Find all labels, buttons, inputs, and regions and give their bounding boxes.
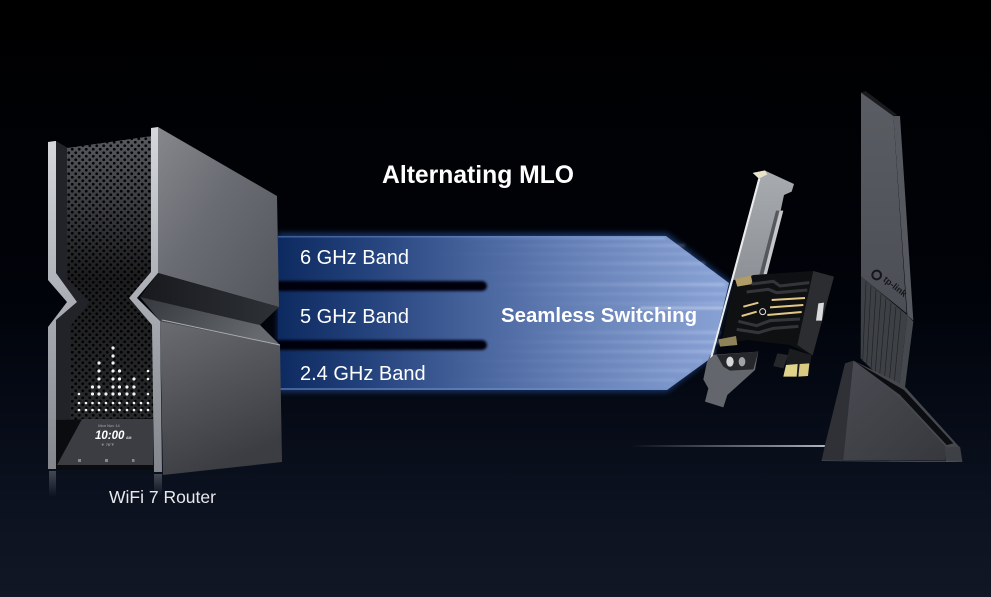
logo mark <box>872 271 881 279</box>
label: 5 GHz band: 5 GHz Band <box>300 306 409 328</box>
heatsink ridges <box>737 281 809 333</box>
title: Alternating MLO <box>382 162 574 189</box>
PCIe gold pins left <box>783 364 798 377</box>
arrow streaks <box>278 236 726 390</box>
antenna lower side <box>898 315 913 395</box>
PCIe WiFi card <box>703 170 834 407</box>
board side <box>797 271 834 355</box>
card bracket plate <box>711 171 794 357</box>
antenna back edge <box>861 91 897 116</box>
slit between 5 GHz and 2.4 GHz <box>270 340 487 350</box>
router dark wedge <box>140 273 279 325</box>
arrow: band streams <box>270 233 732 392</box>
antenna ribs <box>863 282 901 393</box>
arrow glow <box>278 233 732 392</box>
router base <box>56 418 156 470</box>
logo wordmark: tp-link <box>881 274 909 299</box>
side connector <box>816 303 824 321</box>
PCIe connector <box>783 348 812 377</box>
router left steel strip <box>48 141 77 469</box>
router top panel <box>158 127 279 307</box>
label: 6 GHz band: 6 GHz Band <box>300 247 409 269</box>
antenna connector top <box>735 276 753 287</box>
router perforated mesh <box>67 136 154 420</box>
gold contacts on heatsink <box>742 298 805 316</box>
PCIe gold pins right <box>798 363 809 377</box>
tp-link logo on antenna <box>872 271 909 299</box>
bracket lower tail <box>703 352 758 407</box>
router reflection <box>49 471 162 497</box>
floor line <box>630 445 826 447</box>
router lower panel <box>160 321 282 475</box>
stand outer rim <box>853 361 961 448</box>
antenna with stand <box>822 91 962 462</box>
router left inner wall <box>56 141 89 468</box>
antenna ribbed lower part <box>861 277 907 395</box>
mesh shading <box>67 136 154 420</box>
screen time: 10:00 <box>95 430 125 442</box>
stand foot line <box>822 460 962 463</box>
router light wedge <box>140 297 280 345</box>
antenna upper blade <box>861 93 907 313</box>
router touch screen <box>57 419 153 465</box>
screen panel <box>57 419 153 465</box>
arrow body <box>278 236 729 390</box>
label: seamless switching: Seamless Switching <box>501 305 697 327</box>
screen AM: AM <box>126 436 132 440</box>
PCIe stub <box>773 353 788 368</box>
router right steel strip <box>129 127 162 472</box>
stand slot <box>855 362 953 445</box>
WiFi 7 router <box>48 127 282 497</box>
wedge highlight <box>162 320 280 345</box>
bracket lit edge <box>710 178 760 358</box>
bracket top lip <box>753 170 767 179</box>
slit between 6 GHz and 5 GHz <box>270 281 487 291</box>
router LED dots <box>78 346 149 411</box>
screen weather: ☀ 76°F <box>101 442 115 447</box>
tp-link logo on card <box>760 309 766 315</box>
screen icons <box>78 459 134 462</box>
stand right end <box>945 447 962 462</box>
antenna side <box>893 116 913 321</box>
lower bracket holes <box>717 352 758 371</box>
label: WiFi 7 router: WiFi 7 Router <box>109 487 216 507</box>
screen date: Mon Nov 14 <box>98 423 121 428</box>
bracket slot <box>762 211 783 275</box>
circuit board <box>722 271 834 355</box>
stand left face <box>822 361 853 460</box>
antenna connector bottom <box>718 336 737 347</box>
stand main face <box>843 361 946 461</box>
label: 2.4 GHz band: 2.4 GHz Band <box>300 363 426 385</box>
